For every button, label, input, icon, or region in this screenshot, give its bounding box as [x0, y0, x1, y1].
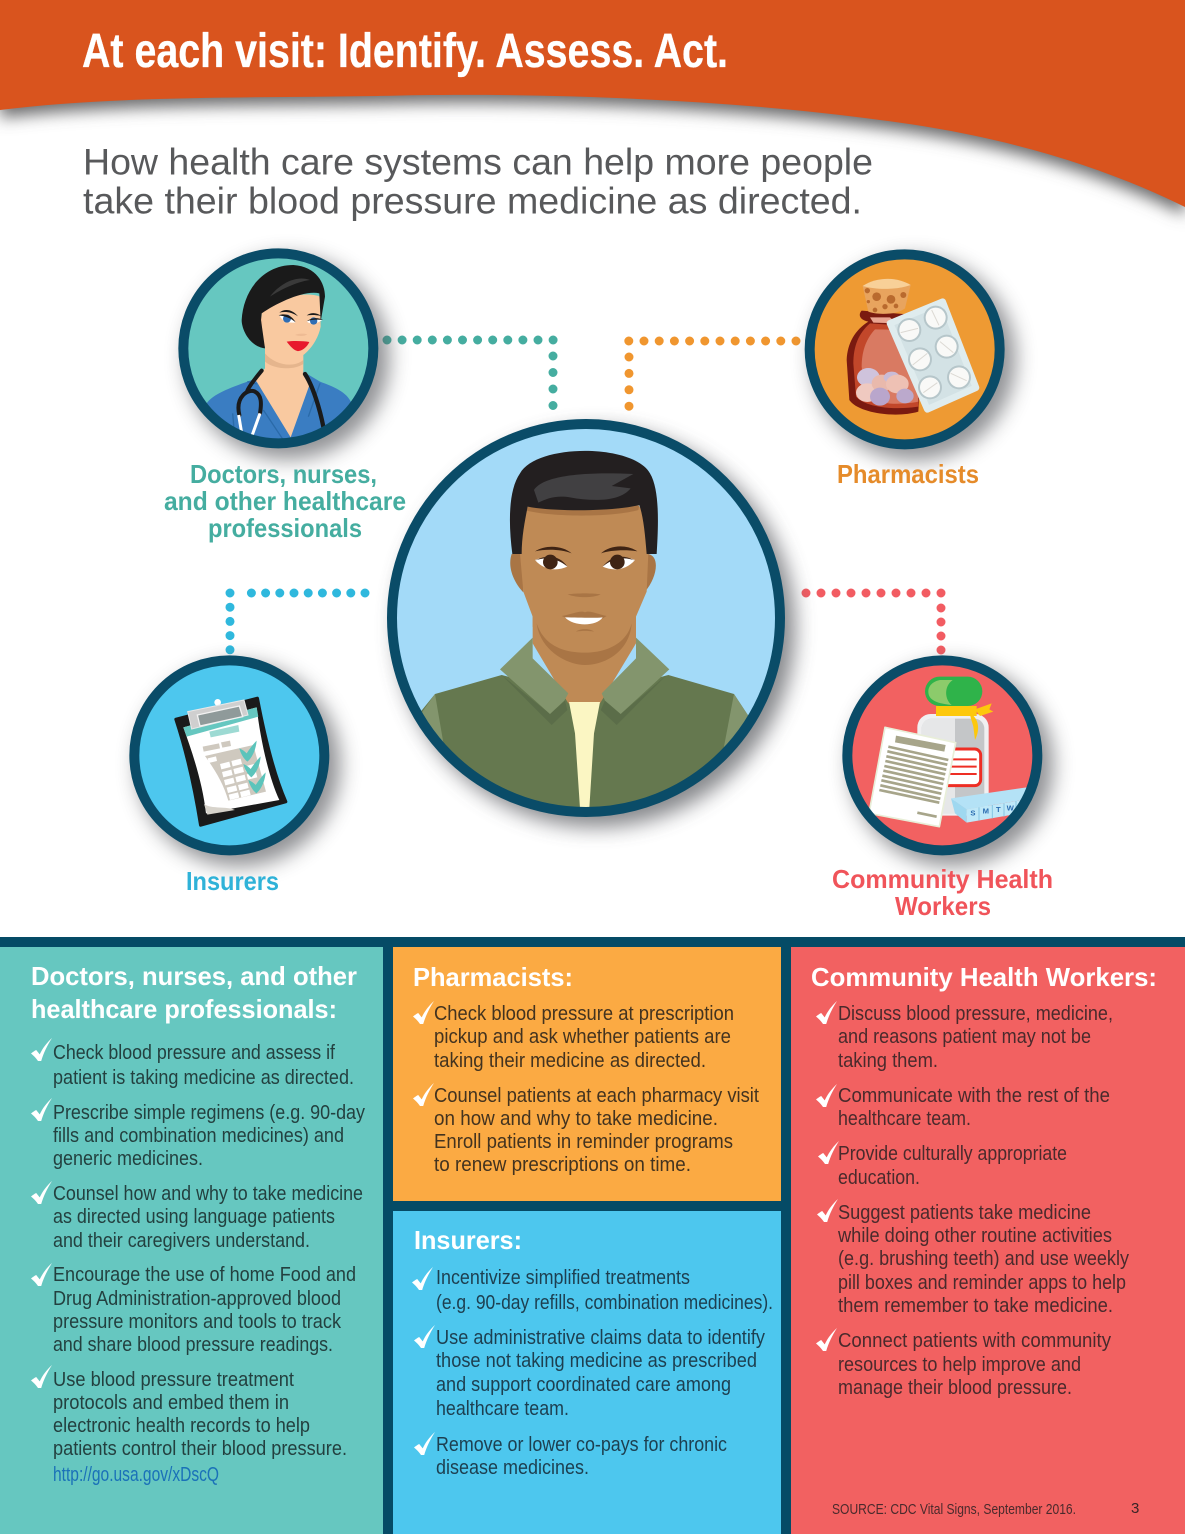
label: community health workers: Workers [895, 891, 991, 921]
icon: insurer clipboard [134, 660, 340, 866]
bullet: communicate [816, 1084, 1110, 1130]
bullet: counsel at pharmacy visit: Counsel patients at each pharmacy visit [434, 1085, 759, 1107]
bullet: incentivize: Incentivize simplified treatments [436, 1267, 690, 1289]
bullet: suggest routines [817, 1199, 1129, 1317]
bullet: encourage home monitoring [31, 1263, 356, 1356]
bullet: counsel: and their caregivers understand. [53, 1230, 310, 1252]
icon: community health worker supplies [847, 660, 1053, 866]
bullet: counsel at pharmacy visit: to renew prescriptions on time. [434, 1154, 691, 1176]
bullet: co-pays: Remove or lower co-pays for chronic [436, 1434, 727, 1456]
bullet: counsel: as directed using language patients [53, 1206, 335, 1228]
bullet: suggest routines: Suggest patients take medicine [838, 1202, 1091, 1224]
dotted connector: doctors [387, 340, 554, 408]
bullet: claims data [414, 1325, 765, 1420]
bullet: incentivize [412, 1267, 773, 1314]
bullet: check at pickup: Check blood pressure at prescription [434, 1003, 734, 1025]
bullet: claims data: those not taking medicine as prescribed [436, 1350, 757, 1372]
bullet: treatment protocols [31, 1365, 347, 1486]
bullet: counsel [31, 1181, 363, 1252]
bullet: community resources: resources to help improve and [838, 1354, 1081, 1376]
bullet: treatment protocols: patients control their blood pressure. [53, 1438, 347, 1460]
bullet: treatment protocols: electronic health records to help [53, 1415, 310, 1437]
page number: 3 [1131, 1500, 1139, 1517]
bullet: check blood pressure: Check blood pressure and assess if [53, 1042, 335, 1064]
bullet: check at pickup: pickup and ask whether patients are [434, 1026, 731, 1048]
heading: doctors panel [31, 961, 357, 1024]
label: pharmacists: Pharmacists [837, 459, 979, 489]
bullet: treatment protocols: Use blood pressure treatment [53, 1369, 294, 1391]
label: doctors, nurses: and other healthcare [164, 486, 406, 516]
bullet: counsel at pharmacy visit: Enroll patients in reminder programs [434, 1131, 733, 1153]
bullet: suggest routines: them remember to take medicine. [838, 1295, 1113, 1317]
bullet: encourage home monitoring: Drug Administration-approved blood [53, 1288, 341, 1310]
bullet: encourage home monitoring: and share blood pressure readings. [53, 1334, 333, 1356]
bullet: co-pays [414, 1432, 727, 1479]
bullet: prescribe simple regimens: Prescribe simple regimens (e.g. 90-day [53, 1102, 365, 1124]
bullet: communicate: Communicate with the rest of the [838, 1085, 1110, 1107]
label: doctors, nurses [164, 459, 406, 543]
bullet: incentivize: (e.g. 90-day refills, combination medicines). [436, 1292, 773, 1314]
bullet: education: education. [838, 1167, 920, 1189]
icon: pharmacist medicine [810, 254, 1016, 460]
panel: doctors, nurses and other healthcare professionals [0, 947, 383, 1534]
icon: community health worker supplies: S [970, 809, 975, 818]
bullet: suggest routines: while doing other routine activities [837, 1225, 1112, 1247]
bullet: prescribe simple regimens [31, 1098, 365, 1170]
label: community health workers: Community Health [832, 864, 1053, 894]
heading: doctors panel: healthcare professionals: [31, 994, 337, 1024]
bullet: suggest routines: pill boxes and reminder apps to help [838, 1272, 1126, 1294]
bullet: communicate: healthcare team. [838, 1108, 971, 1130]
dotted connector: insurers [230, 593, 365, 651]
bullet: check at pickup [413, 1001, 734, 1072]
bullet: treatment protocols: http://go.usa.gov/xDscQ [53, 1464, 219, 1486]
dotted connector: community health workers [806, 593, 942, 652]
bullet: co-pays: disease medicines. [436, 1457, 589, 1479]
bullet: treatment protocols: protocols and embed them in [53, 1392, 289, 1414]
bullet: prescribe simple regimens: generic medicines. [53, 1148, 203, 1170]
bullet: prescribe simple regimens: fills and combination medicines) and [53, 1125, 344, 1147]
bullet: discuss: taking them. [838, 1050, 938, 1072]
bullet: claims data: and support coordinated care among [436, 1374, 731, 1396]
bullet: discuss [816, 1001, 1113, 1072]
icon: doctor [183, 253, 389, 459]
icon: community health worker supplies: T [996, 805, 1001, 814]
bullet: encourage home monitoring: pressure monitors and tools to track [53, 1311, 342, 1333]
icon: community health worker supplies: M [983, 807, 989, 816]
bullet: counsel at pharmacy visit: on how and why to take medicine. [434, 1108, 718, 1130]
source note: SOURCE: CDC Vital Signs, September 2016. [832, 1501, 1076, 1518]
bullet: community resources: Connect patients with community [838, 1330, 1111, 1352]
header band [0, 0, 1185, 215]
label: community health workers [832, 864, 1053, 921]
label: doctors, nurses: professionals [208, 513, 362, 543]
bullet: community resources: manage their blood pressure. [838, 1377, 1072, 1399]
subtitle: take their blood pressure medicine as directed. [83, 180, 862, 222]
icon: central patient [392, 424, 795, 827]
dotted connector: pharmacists [628, 341, 796, 408]
label: doctors, nurses: Doctors, nurses, [190, 459, 377, 489]
icon: community health worker supplies: W [1007, 803, 1015, 812]
panel: pharmacists [393, 947, 781, 1201]
panel: insurers [393, 1211, 781, 1534]
panel: community health workers [791, 947, 1185, 1534]
bullet: discuss: and reasons patient may not be [838, 1026, 1091, 1048]
subtitle [83, 142, 873, 222]
bullet: counsel at pharmacy visit [413, 1083, 759, 1176]
bullet: claims data: healthcare team. [436, 1398, 569, 1420]
bullet: discuss: Discuss blood pressure, medicine, [838, 1003, 1113, 1025]
heading: insurers panel: Insurers: [414, 1225, 522, 1255]
bullet: check at pickup: taking their medicine as directed. [434, 1050, 706, 1072]
bullet: suggest routines: (e.g. brushing teeth) and use weekly [838, 1248, 1129, 1270]
panel backdrop [0, 937, 1185, 1534]
title: At each visit: Identify. Assess. Act. [82, 25, 728, 78]
bullet: counsel: Counsel how and why to take medicine [53, 1183, 363, 1205]
bullet: check blood pressure: patient is taking medicine as directed. [53, 1067, 354, 1089]
heading: pharmacists panel: Pharmacists: [413, 962, 573, 992]
bullet: check blood pressure [31, 1038, 354, 1089]
bullet: claims data: Use administrative claims data to identify [436, 1327, 765, 1349]
bullet: education [818, 1141, 1067, 1189]
subtitle: How health care systems can help more people [83, 142, 873, 182]
label: insurers: Insurers [186, 866, 279, 896]
bullet: education: Provide culturally appropriate [838, 1143, 1067, 1165]
heading: doctors panel: Doctors, nurses, and other [31, 961, 357, 991]
heading: community health workers panel: Community Health Workers: [811, 962, 1157, 992]
bullet: community resources [816, 1328, 1111, 1399]
bullet: encourage home monitoring: Encourage the use of home Food and [53, 1264, 356, 1286]
